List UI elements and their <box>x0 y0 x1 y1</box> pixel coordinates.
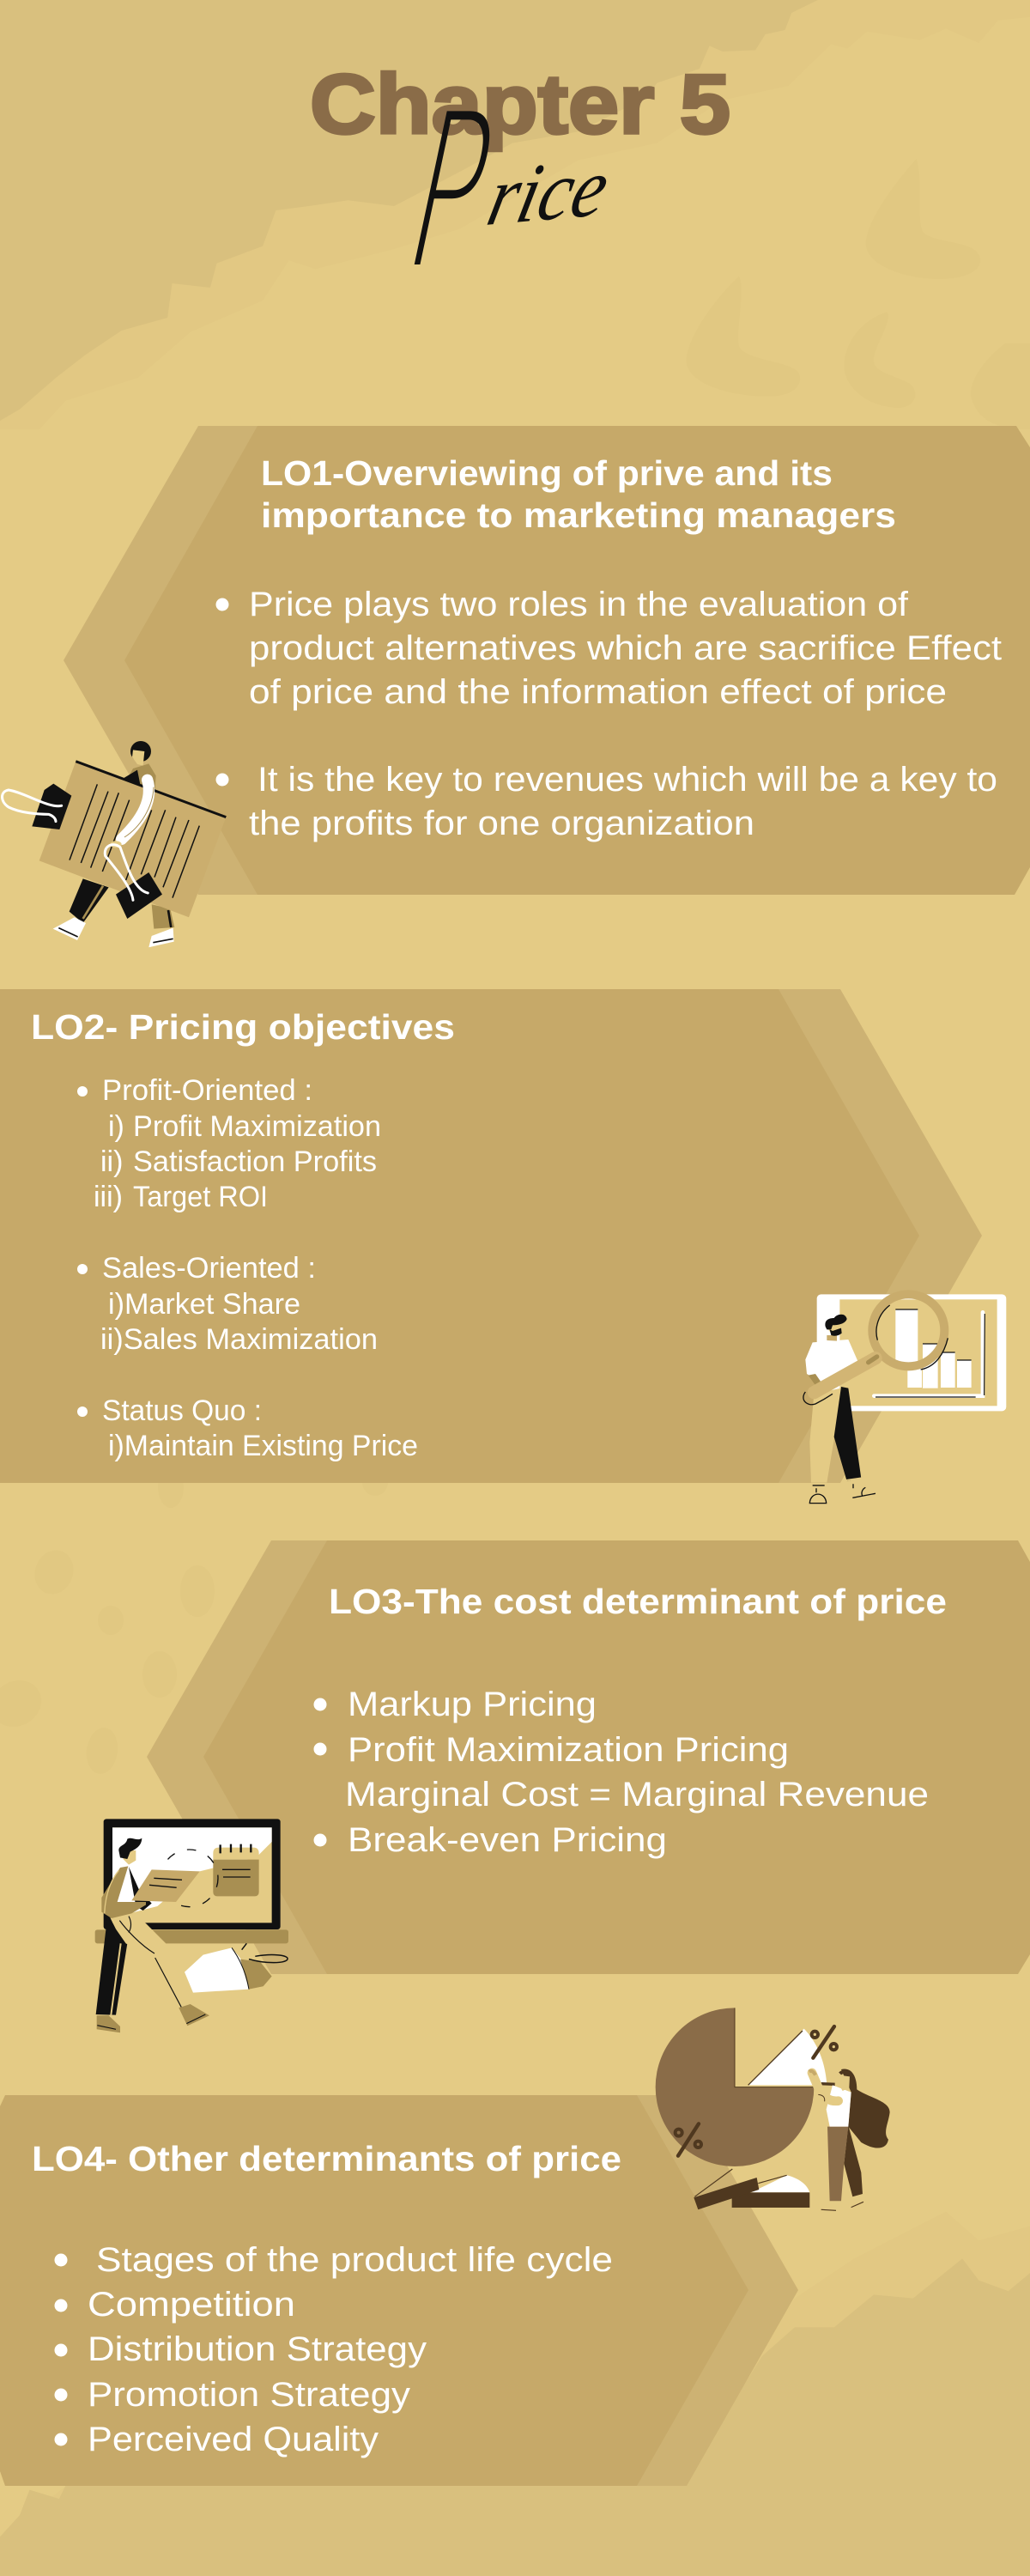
LO4 list: Distribution Strategy <box>88 2330 427 2368</box>
panel: LO1 <box>64 426 1030 895</box>
LO4 heading: LO4- Other determinants of price <box>32 2139 621 2178</box>
LO2 list: Profit-Oriented : <box>102 1074 312 1107</box>
LO3 list: Marginal Cost = Marginal Revenue <box>345 1776 929 1814</box>
illustration: person at monitor <box>95 1819 288 2032</box>
LO2 list: Satisfaction Profits <box>133 1145 377 1178</box>
LO4 list: Stages of the product life cycle <box>96 2241 613 2279</box>
LO1 bullets: of price and the information effect of price <box>249 673 947 711</box>
subtitle: Price <box>390 70 618 314</box>
LO1 bullets: product alternatives which are sacrifice Effect <box>249 629 1002 667</box>
LO3 list: Markup Pricing <box>348 1686 597 1723</box>
panel: LO4 <box>0 2095 798 2486</box>
LO4 list: Promotion Strategy <box>88 2376 410 2414</box>
title: Chapter 5 <box>310 57 730 151</box>
LO4 list: Perceived Quality <box>88 2421 379 2458</box>
LO1 heading: importance to marketing managers <box>261 495 896 535</box>
LO2 list <box>77 1074 418 1462</box>
LO3 list: Profit Maximization Pricing <box>348 1731 789 1769</box>
LO2 list: Profit Maximization <box>133 1110 381 1143</box>
LO2 list: i)Maintain Existing Price <box>108 1430 418 1462</box>
LO2 heading: LO2- Pricing objectives <box>31 1007 455 1047</box>
subtitle: Price: rice <box>480 140 618 244</box>
LO1 bullets: Price plays two roles in the evaluation of <box>249 586 909 623</box>
LO2 list: iii) <box>94 1181 123 1213</box>
illustration: man with magnifier and chart <box>803 1294 1006 1504</box>
LO4 list <box>55 2241 613 2458</box>
LO2 list: i)Market Share <box>108 1288 300 1321</box>
subtitle: Price: P <box>390 70 512 314</box>
LO1 heading: LO1-Overviewing of prive and its <box>261 453 833 493</box>
LO3 list: Break-even Pricing <box>348 1821 667 1859</box>
LO1 heading <box>261 453 896 535</box>
LO1 bullets: It is the key to revenues which will be a key to <box>258 761 997 799</box>
LO2 list: Status Quo : <box>102 1394 262 1427</box>
LO1 bullets: the profits for one organization <box>249 805 754 842</box>
illustration: person carrying document <box>2 741 226 947</box>
LO3 list <box>314 1686 929 1859</box>
illustration: woman with pie chart <box>656 2008 890 2210</box>
LO3 heading: LO3-The cost determinant of price <box>329 1582 947 1621</box>
LO2 list: i) <box>108 1110 124 1143</box>
LO1 bullets <box>216 586 1002 842</box>
LO2 list: Sales-Oriented : <box>102 1252 316 1285</box>
panel: LO2 <box>0 989 982 1483</box>
LO2 list: ii) <box>100 1145 123 1178</box>
LO2 list: Target ROI <box>133 1181 268 1213</box>
LO4 list: Competition <box>88 2286 295 2324</box>
panel: LO3 <box>147 1540 1030 1974</box>
LO2 list: ii)Sales Maximization <box>100 1323 378 1356</box>
